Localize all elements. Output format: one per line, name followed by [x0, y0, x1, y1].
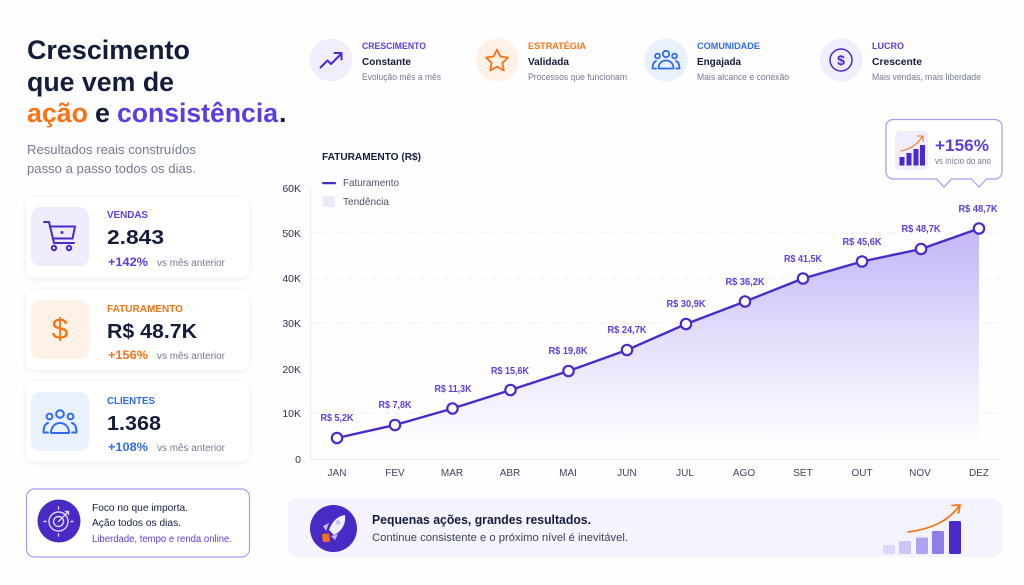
data labels: R$ 48,7K: [958, 204, 998, 215]
panel: faturamento: R$ 48.7K: [107, 321, 198, 343]
feature: lucro: Mais vendas, mais liberdade: [872, 72, 981, 82]
icon: shopping cart: [44, 222, 75, 250]
data labels: R$ 41,5K: [784, 254, 823, 265]
month labels: JAN: [328, 468, 346, 479]
title: e: [95, 98, 110, 128]
y axis labels: 30K: [282, 318, 301, 330]
icon: star: [486, 50, 508, 70]
data labels: R$ 30,9K: [666, 299, 706, 310]
panel: vendas: [26, 197, 249, 278]
month labels: NOV: [909, 468, 931, 479]
month labels: FEV: [385, 468, 405, 479]
callout: foco: Ação todos os dias.: [92, 517, 181, 529]
data labels: R$ 36,2K: [726, 277, 765, 288]
month labels: JUN: [617, 468, 637, 479]
chart title: FATURAMENTO (R$): [322, 151, 421, 163]
data points: [332, 223, 984, 443]
month labels: MAR: [441, 468, 463, 479]
feature: estratégia: Validada: [528, 56, 569, 68]
banner: pequenas ações: [288, 498, 1002, 557]
panel: clientes: +108%: [108, 440, 148, 454]
month labels: AGO: [733, 468, 755, 479]
legend: Tendência: [343, 196, 389, 208]
panel: vendas: vs mês anterior: [157, 258, 226, 269]
data labels: R$ 24,7K: [608, 325, 647, 336]
panel: faturamento: FATURAMENTO: [107, 304, 183, 315]
panel: faturamento: +156%: [108, 348, 148, 362]
feature: comunidade: COMUNIDADE: [697, 41, 760, 52]
panel: clientes: vs mês anterior: [157, 443, 226, 454]
data labels: R$ 19,8K: [548, 346, 588, 357]
callout: foco: Foco no que importa.: [92, 502, 188, 514]
callout: +156%: +156%: [935, 136, 989, 155]
month labels: DEZ: [969, 468, 989, 479]
feature: crescimento: Constante: [362, 56, 411, 68]
subtitle: Resultados reais construídos: [27, 142, 196, 157]
icon: target: [44, 507, 73, 536]
feature: estratégia: ESTRATÉGIA: [528, 41, 586, 52]
y axis labels: 10K: [282, 408, 301, 420]
month labels: OUT: [851, 468, 873, 479]
data labels: R$ 7,8K: [378, 400, 412, 411]
callout: +156%: [886, 120, 1002, 187]
title: ação: [27, 98, 88, 128]
feature: crescimento: Evolução mês a mês: [362, 72, 441, 82]
month labels: SET: [793, 468, 813, 479]
callout: foco: [26, 489, 250, 557]
panel: vendas: VENDAS: [107, 210, 148, 221]
icon: people: [44, 410, 76, 433]
month labels: MAI: [559, 468, 577, 479]
icon: dollar: $: [52, 313, 69, 346]
panel: vendas: 2.843: [107, 227, 164, 249]
y axis labels: 40K: [282, 273, 301, 285]
data labels: R$ 15,6K: [491, 366, 530, 377]
feature: lucro: Crescente: [872, 56, 922, 68]
subtitle: [27, 142, 196, 176]
y axis labels: 50K: [282, 228, 301, 240]
feature: comunidade: Mais alcance e conexão: [697, 72, 789, 82]
banner: pequenas ações: Continue consistente e o próximo nível é inevitável.: [372, 532, 628, 544]
feature: comunidade: [644, 38, 789, 82]
revenue line: [337, 228, 979, 438]
icon: bars with arrow: [895, 131, 928, 170]
title: .: [279, 98, 287, 128]
icon: rocket: [322, 515, 345, 542]
callout: +156%: vs início do ano: [935, 156, 991, 166]
panel: clientes: [26, 382, 249, 462]
feature: estratégia: Processos que funcionam: [528, 72, 627, 82]
legend: [322, 177, 399, 208]
panel: clientes: 1.368: [107, 413, 161, 435]
chart: faturamento: [282, 151, 1002, 479]
month labels: [328, 468, 989, 479]
feature: estratégia: [476, 38, 627, 82]
title: consistência: [117, 98, 279, 128]
legend: Faturamento: [343, 177, 399, 189]
panel: clientes: CLIENTES: [107, 396, 155, 407]
feature: crescimento: CRESCIMENTO: [362, 41, 426, 52]
data labels: R$ 11,3K: [434, 384, 472, 395]
feature: lucro: LUCRO: [872, 41, 904, 52]
month labels: JUL: [676, 468, 694, 479]
data labels: [320, 204, 998, 424]
icon: dollar coin: [830, 49, 852, 71]
title: Crescimento: [27, 35, 190, 65]
feature: lucro: [820, 38, 981, 82]
callout: foco: Liberdade, tempo e renda online.: [92, 534, 232, 545]
panel: faturamento: [26, 290, 249, 370]
panel: vendas: +142%: [108, 255, 148, 269]
subtitle: passo a passo todos os dias.: [27, 161, 196, 176]
data labels: R$ 45,6K: [842, 237, 882, 248]
y axis labels: 60K: [282, 183, 301, 195]
title: [27, 35, 287, 128]
feature: crescimento: [310, 38, 441, 82]
icon: trend arrow: [320, 53, 342, 68]
panel: faturamento: vs mês anterior: [157, 351, 226, 362]
y axis labels: 0: [295, 454, 301, 466]
title: que vem de: [27, 67, 174, 97]
month labels: ABR: [500, 468, 520, 479]
y axis labels: 20K: [282, 364, 301, 376]
feature: comunidade: Engajada: [697, 56, 741, 68]
data labels: R$ 5,2K: [320, 413, 354, 424]
banner: pequenas ações: Pequenas ações, grandes resultados.: [372, 513, 591, 527]
gridlines and axes: [310, 188, 1002, 460]
icon: dollar coin: $: [837, 52, 845, 68]
icon: community: [652, 51, 680, 68]
area under line: [337, 228, 979, 448]
data labels: R$ 48,7K: [902, 224, 941, 235]
icon: growth bars: [883, 505, 961, 554]
y axis labels: [282, 183, 301, 466]
